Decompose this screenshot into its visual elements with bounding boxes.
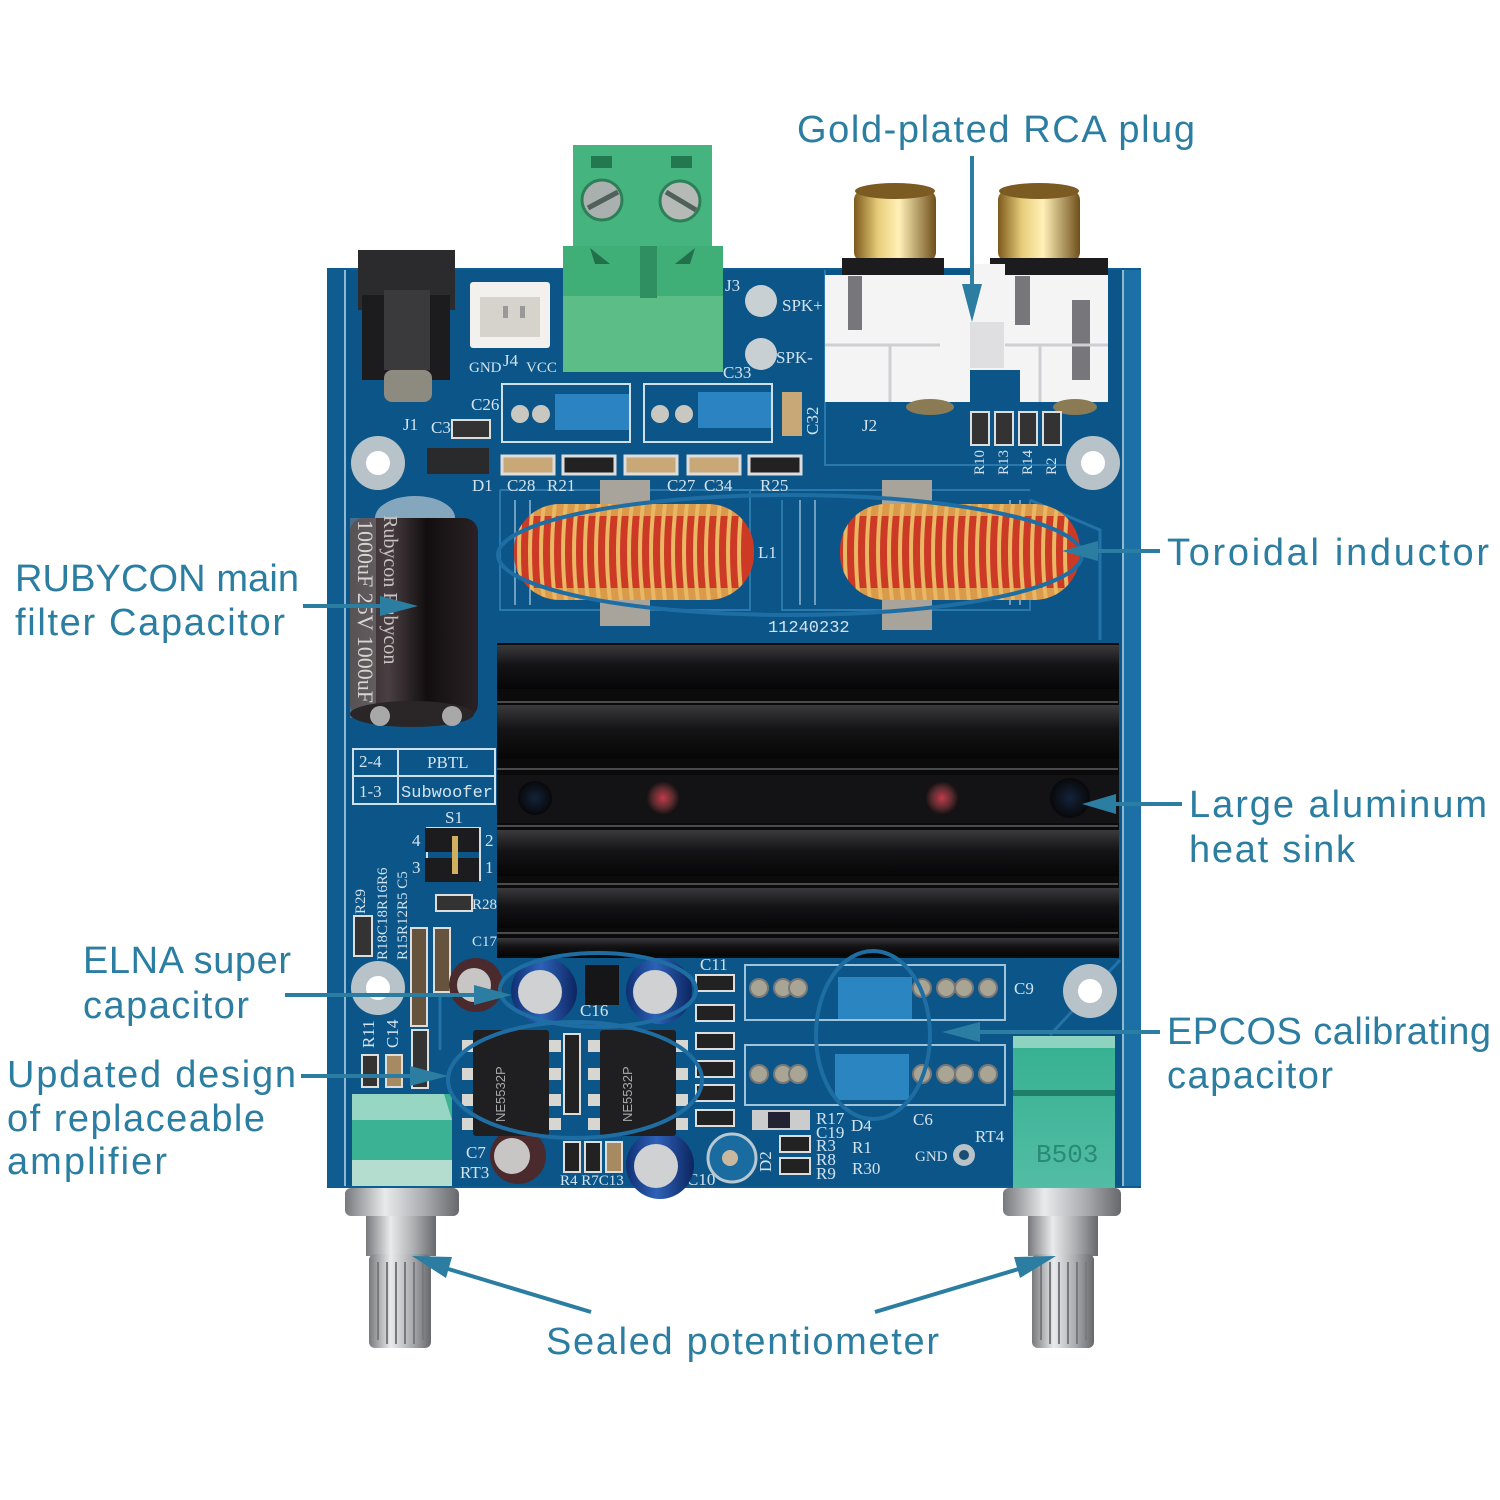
right potentiometer: [1003, 1036, 1121, 1348]
label: Updated design of replaceable amplifier: amplifier: [7, 1141, 167, 1183]
replaceable op-amp chips: NE5532P: [620, 1066, 635, 1122]
board silkscreen labels: C16: [580, 1001, 608, 1020]
replaceable op-amp chips: NE5532P: [493, 1066, 508, 1122]
board silkscreen labels: 2-4: [359, 752, 382, 771]
board silkscreen labels: C7: [466, 1143, 486, 1162]
board silkscreen labels: C34: [704, 476, 733, 495]
label: Gold-plated RCA plug: [797, 109, 1195, 322]
main filter capacitor: [350, 496, 478, 727]
board silkscreen labels: C9: [1014, 979, 1034, 998]
right inductor: [840, 504, 1080, 600]
label: ELNA super capacitor: [83, 940, 512, 1027]
board silkscreen labels: C27: [667, 476, 696, 495]
green screw terminal: [563, 145, 723, 372]
left potentiometer: [345, 1094, 459, 1348]
label: EPCOS calibrating capacitor: capacitor: [1167, 1055, 1333, 1097]
label: RUBYCON main filter Capacitor: filter Capacitor: [15, 602, 285, 644]
table lines: [353, 749, 495, 880]
label: Updated design of replaceable amplifier: [7, 1054, 448, 1183]
board silkscreen labels: 4: [412, 831, 421, 850]
board silkscreen labels: R17: [816, 1109, 845, 1128]
jumper: [425, 828, 479, 882]
label: RUBYCON main filter Capacitor: [15, 558, 418, 644]
label: EPCOS calibrating capacitor: EPCOS calibrating: [1167, 1011, 1491, 1053]
left inductor: [514, 504, 754, 600]
board silkscreen labels: C6: [913, 1110, 933, 1129]
left gold barrel: [854, 183, 936, 262]
board silkscreen labels: VCC: [526, 360, 557, 376]
board silkscreen labels: R29: [353, 889, 369, 914]
board silkscreen labels: [353, 276, 1060, 1189]
board silkscreen labels: R18C18R16R6: [375, 867, 391, 960]
board silkscreen labels: R28: [472, 897, 497, 913]
board silkscreen labels: C10: [687, 1170, 715, 1189]
callout ellipses: [448, 495, 1082, 1138]
board silkscreen labels: C3: [431, 418, 451, 437]
label: Large aluminum heat sink: [1082, 784, 1487, 871]
label: Gold-plated RCA plug: Gold-plated RCA plug: [797, 109, 1195, 151]
right gold barrel: [998, 183, 1080, 262]
white 2-pin connector: [470, 282, 550, 348]
ELNA capacitors: [449, 958, 694, 1199]
replaceable op-amp chips: [462, 1030, 688, 1136]
DC power jack: [358, 250, 455, 402]
board silkscreen labels: D4: [851, 1116, 872, 1135]
board silkscreen labels: J2: [862, 416, 877, 435]
board silkscreen labels: C14: [383, 1019, 402, 1048]
board silkscreen labels: C17: [472, 934, 498, 950]
board silkscreen labels: GND: [915, 1149, 948, 1165]
aluminum heat sink: [497, 643, 1119, 958]
board silkscreen labels: R30: [852, 1159, 880, 1178]
board silkscreen labels: J3: [725, 276, 740, 295]
board silkscreen labels: R13: [996, 450, 1012, 475]
label: Large aluminum heat sink: heat sink: [1189, 829, 1356, 871]
board silkscreen labels: C11: [700, 955, 728, 974]
board silkscreen labels: SPK-: [776, 348, 813, 367]
main filter capacitor: Rubycon Rubycon: [379, 515, 401, 664]
board silkscreen labels: R25: [760, 476, 788, 495]
board silkscreen labels: D1: [472, 476, 493, 495]
board silkscreen labels: R8: [816, 1150, 836, 1169]
right potentiometer: B503: [1036, 1140, 1098, 1170]
board silkscreen labels: 1: [485, 858, 494, 877]
board silkscreen labels: R10: [972, 450, 988, 475]
mounting holes: [351, 285, 1120, 1166]
circuit board: [327, 268, 1141, 1189]
board silkscreen labels: R21: [547, 476, 575, 495]
board silkscreen labels: GND: [469, 360, 502, 376]
label: Toroidal inductor: Toroidal inductor: [1167, 532, 1489, 574]
board silkscreen labels: D2: [756, 1151, 775, 1172]
board silkscreen labels: SPK+: [782, 296, 823, 315]
label: Sealed potentiometer: Sealed potentiometer: [546, 1321, 939, 1363]
board silkscreen labels: C26: [471, 395, 499, 414]
board silkscreen labels: C32: [803, 407, 822, 435]
label: RUBYCON main filter Capacitor: RUBYCON main: [15, 558, 299, 600]
board silkscreen labels: RT3: [460, 1163, 489, 1182]
board silkscreen labels: R1: [852, 1138, 872, 1157]
board silkscreen labels: C33: [723, 363, 751, 382]
board silkscreen labels: J4: [503, 351, 519, 370]
label: Large aluminum heat sink: Large aluminum: [1189, 784, 1487, 826]
label: EPCOS calibrating capacitor: [942, 1011, 1491, 1097]
small input capacitors: [427, 384, 1061, 474]
label: Updated design of replaceable amplifier: Updated design: [7, 1054, 296, 1096]
board silkscreen labels: 2: [485, 831, 494, 850]
board silkscreen labels: R3: [816, 1136, 836, 1155]
label: Updated design of replaceable amplifier: of replaceable: [7, 1098, 265, 1140]
board silkscreen labels: R14: [1020, 449, 1036, 475]
board silkscreen labels: L1: [758, 543, 777, 562]
board silkscreen labels: C28: [507, 476, 535, 495]
EPCOS calibrating capacitors: [750, 977, 997, 1100]
board silkscreen labels: R2: [1044, 457, 1060, 475]
board silkscreen labels: R9: [816, 1164, 836, 1183]
board silkscreen labels: J1: [403, 415, 418, 434]
board silkscreen labels: 11240232: [768, 619, 850, 638]
board silkscreen labels: S1: [445, 808, 463, 827]
board silkscreen labels: C19: [816, 1123, 844, 1142]
toroidal inductors: [514, 480, 1080, 630]
board silkscreen labels: R4 R7C13: [560, 1173, 624, 1189]
board silkscreen labels: RT4: [975, 1127, 1005, 1146]
board silkscreen labels: R11: [359, 1020, 378, 1048]
board silkscreen labels: R15R12R5 C5: [395, 871, 411, 960]
RCA plugs: gold-plated connectors: [825, 183, 1108, 415]
small resistors: [354, 895, 810, 1182]
board silkscreen labels: PBTL: [427, 753, 469, 772]
label: ELNA super capacitor: ELNA super: [83, 940, 291, 982]
board silkscreen labels: 3: [412, 858, 420, 877]
board silkscreen labels: 1-3: [359, 782, 382, 801]
main filter capacitor: 1000uF 25V 1000uF: [353, 520, 378, 703]
board silkscreen labels: Subwoofer: [401, 784, 493, 803]
label: ELNA super capacitor: capacitor: [83, 985, 249, 1027]
label: Sealed potentiometer: [412, 1256, 1056, 1363]
